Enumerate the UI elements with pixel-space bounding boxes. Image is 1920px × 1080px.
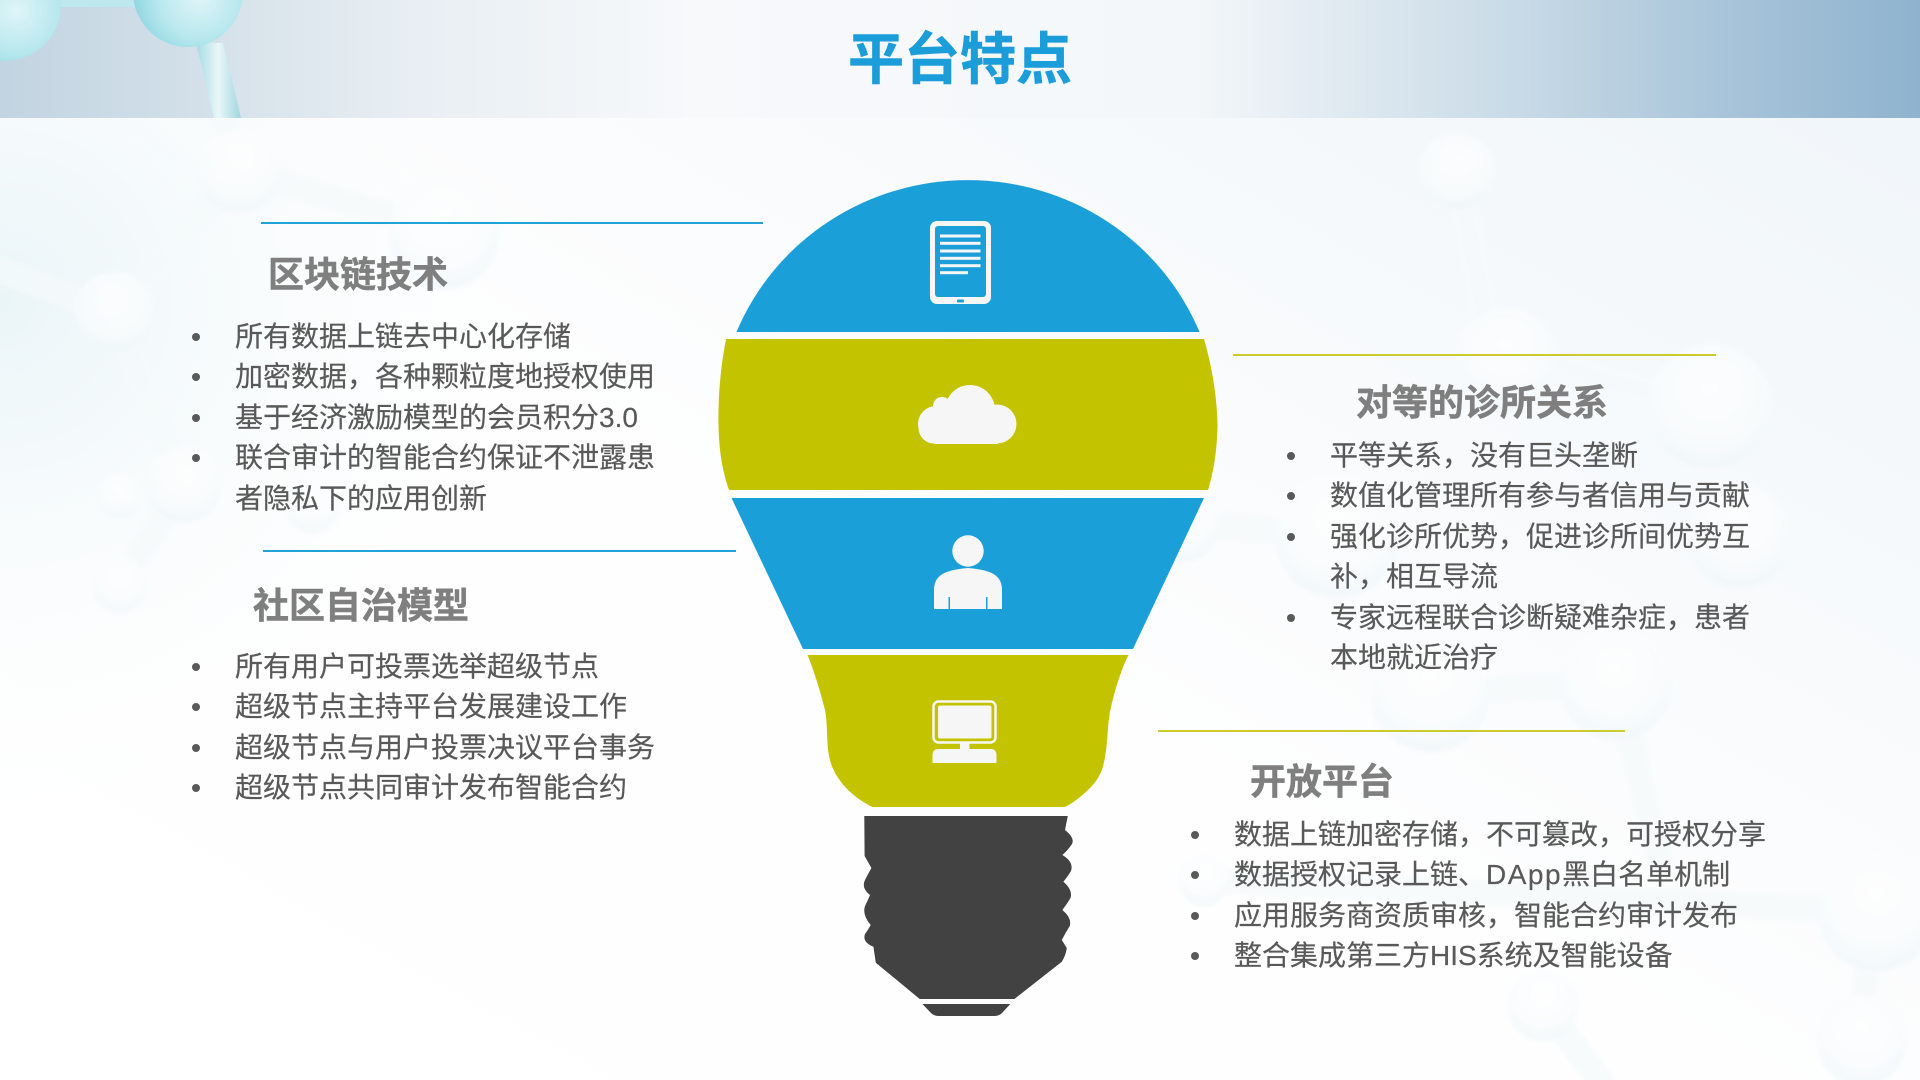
list: community points: 超级节点与用户投票决议平台事务: [235, 732, 655, 763]
list: blockchain points: 所有数据上链去中心化存储: [235, 321, 571, 352]
icon: monitor: [932, 702, 996, 763]
bulb segment 1 with tablet icon: [736, 180, 1200, 332]
heading: community: 社区自治模型: [253, 585, 469, 626]
list: blockchain points: 者隐私下的应用创新: [235, 483, 487, 514]
rule: peer relation: [1233, 354, 1716, 356]
bulb screw base: [864, 816, 1073, 1016]
list: peer relation points: [1287, 440, 1750, 673]
panel: blockchain technology: [192, 254, 655, 514]
bulb segment 3 with person icon: [732, 498, 1204, 649]
heading: blockchain: 区块链技术: [268, 254, 448, 295]
list: blockchain points: 联合审计的智能合约保证不泄露患: [235, 442, 655, 473]
list: community points: 超级节点共同审计发布智能合约: [235, 772, 627, 803]
list: community points: [192, 651, 655, 803]
header band: [0, 0, 1920, 118]
list: blockchain points: 加密数据，各种颗粒度地授权使用: [235, 361, 655, 392]
list: open platform points: 应用服务商资质审核，智能合约审计发布: [1234, 900, 1738, 931]
list: open platform points: 整合集成第三方HIS系统及智能设备: [1234, 940, 1673, 971]
list: open platform points: [1191, 819, 1766, 971]
icon: tablet: [930, 221, 991, 304]
list: peer relation points: 补，相互导流: [1330, 561, 1498, 592]
list: peer relation points: 数值化管理所有参与者信用与贡献: [1330, 480, 1750, 511]
bulb segment 2 with cloud icon: [718, 339, 1218, 490]
heading: peer relations: 对等的诊所关系: [1356, 382, 1608, 423]
list: open platform points: 数据上链加密存储，不可篡改，可授权分享: [1234, 819, 1766, 850]
rule: community: [263, 550, 736, 552]
rule: blockchain: [261, 222, 763, 224]
heading: open platform: 开放平台: [1250, 761, 1394, 802]
rule: open platform: [1158, 730, 1625, 732]
panel: open platform: [1191, 761, 1766, 971]
list: peer relation points: 专家远程联合诊断疑难杂症，患者: [1330, 602, 1750, 633]
list: open platform points: 数据授权记录上链、DApp黑白名单机制: [1234, 859, 1730, 890]
panel: peer clinic relations: [1287, 382, 1750, 673]
list: blockchain points: [192, 321, 655, 514]
list: peer relation points: 强化诊所优势，促进诊所间优势互: [1330, 521, 1750, 552]
icon: cloud: [918, 385, 1016, 444]
list: community points: 超级节点主持平台发展建设工作: [235, 691, 627, 722]
list: blockchain points: 基于经济激励模型的会员积分3.0: [235, 402, 638, 433]
icon: person: [934, 535, 1002, 609]
panel: community autonomy model: [192, 585, 655, 803]
title: 平台特点: [848, 28, 1072, 91]
list: peer relation points: 本地就近治疗: [1330, 642, 1498, 673]
list: community points: 所有用户可投票选举超级节点: [235, 651, 599, 682]
bulb segment 4 with monitor icon: [808, 655, 1128, 807]
list: peer relation points: 平等关系，没有巨头垄断: [1330, 440, 1638, 471]
